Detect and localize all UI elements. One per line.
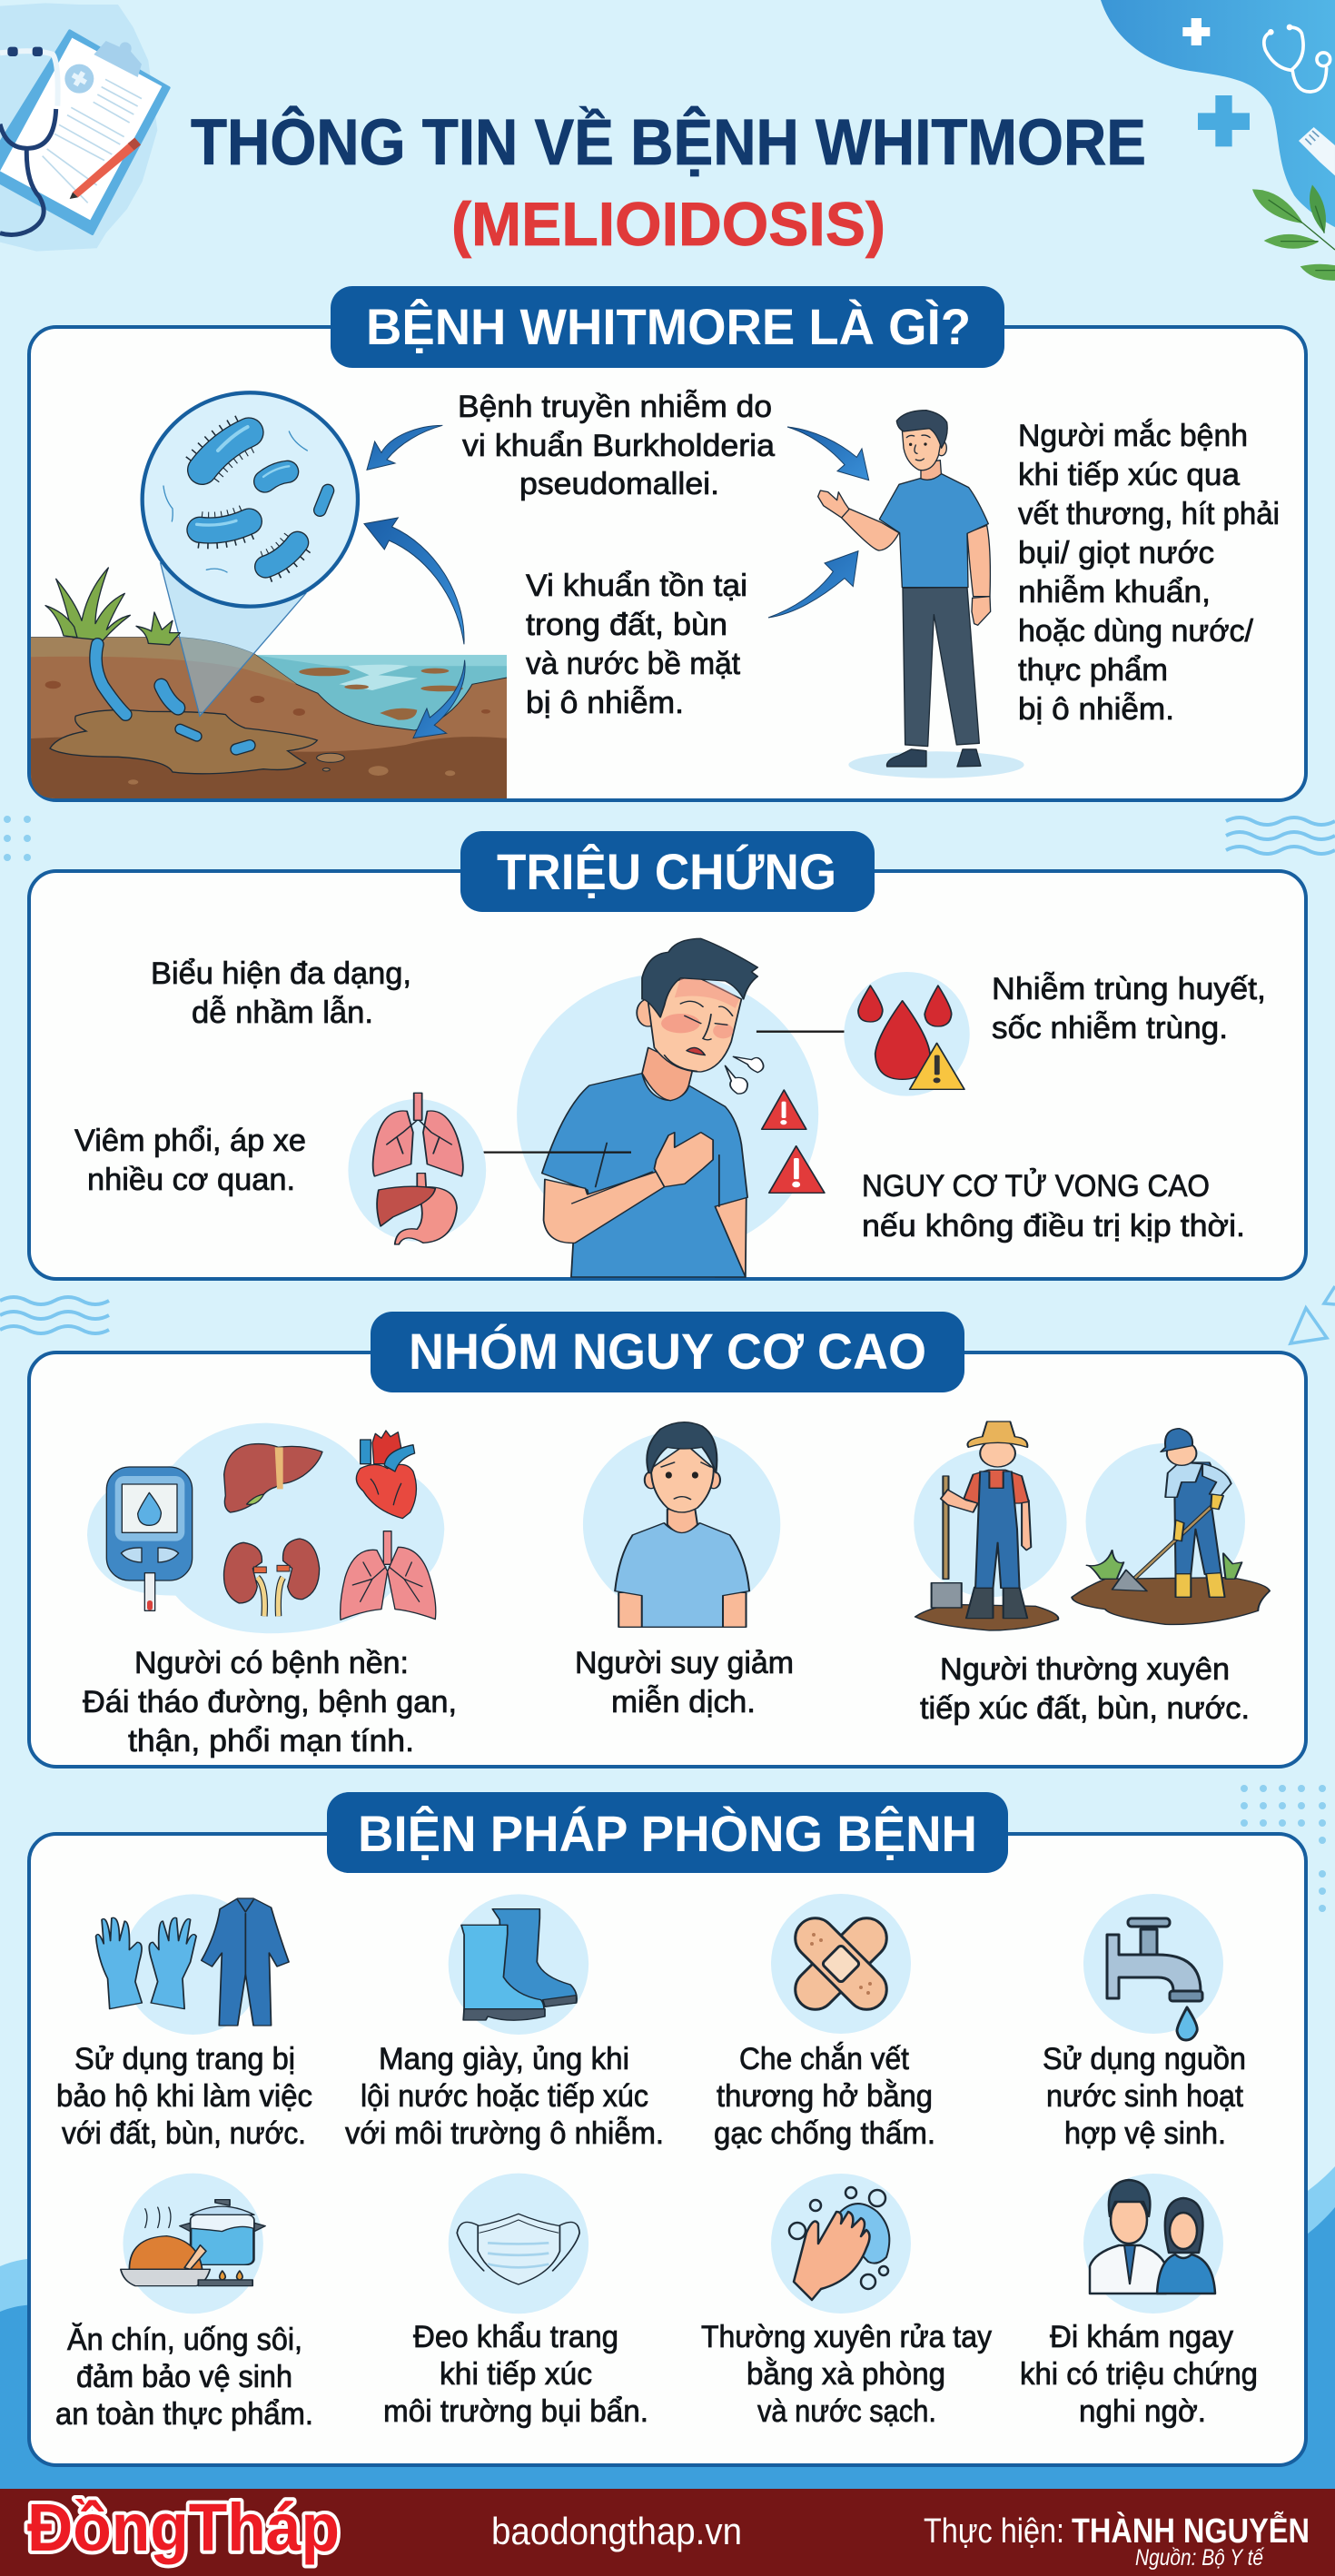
heading pill: NHÓM NGUY CƠ CAO xyxy=(409,1323,926,1380)
illustration: person with weak immunity xyxy=(583,1422,780,1627)
text: how people get infected: nhiễm khuẩn, xyxy=(1018,575,1211,609)
text: see a doctor: nghi ngờ. xyxy=(1079,2394,1206,2429)
text: soil contact xyxy=(920,1652,1250,1726)
text: wear a mask: môi trường bụi bẩn. xyxy=(383,2394,648,2429)
text: pneumonia: Viêm phổi, áp xe xyxy=(74,1124,306,1158)
text: varied manifestations: dễ nhầm lẫn. xyxy=(192,996,373,1030)
text: definition xyxy=(458,390,775,501)
text: immunocompromised: miễn dịch. xyxy=(611,1685,756,1719)
text: cover wounds: thương hở bằng xyxy=(717,2079,933,2114)
text: soil contact: tiếp xúc đất, bùn, nước. xyxy=(920,1691,1250,1726)
icons: medical decoration top right xyxy=(1182,18,1335,281)
heading pill xyxy=(331,286,1004,368)
footer xyxy=(0,2489,1335,2576)
website: baodongthap.vn xyxy=(491,2510,742,2552)
text: high mortality risk xyxy=(862,1169,1245,1243)
text: underlying disease: Đái tháo đường, bệnh gan, xyxy=(83,1685,457,1719)
text: how people get infected: hoặc dùng nước/ xyxy=(1018,614,1254,649)
text: where bacteria live: trong đất, bùn xyxy=(526,608,727,642)
icon: doctor and patient xyxy=(1083,2174,1223,2313)
text: high mortality risk: nếu không điều trị kịp thời. xyxy=(862,1209,1245,1243)
text: wash hands: và nước sạch. xyxy=(757,2394,936,2429)
icon: hand washing xyxy=(771,2174,911,2313)
icon: water tap xyxy=(1083,1894,1223,2040)
illustration: farmer and digger working in mud xyxy=(914,1422,1270,1630)
panel: symptoms xyxy=(29,831,1306,1279)
text: see a doctor: Đi khám ngay xyxy=(1050,2320,1233,2354)
text: wash hands xyxy=(701,2320,992,2429)
text: cover wounds: Che chắn vết xyxy=(739,2042,910,2076)
text: how people get infected: Người mắc bệnh xyxy=(1018,419,1248,453)
panel: prevention xyxy=(29,1792,1306,2465)
text: sepsis: Nhiễm trùng huyết, xyxy=(992,972,1266,1006)
title: THÔNG TIN VỀ BỆNH WHITMORE xyxy=(191,106,1146,179)
icon: face mask xyxy=(449,2174,588,2313)
text: pneumonia xyxy=(74,1124,306,1197)
text: sepsis xyxy=(992,972,1266,1045)
icon: cooked chicken and boiling pot xyxy=(121,2174,265,2313)
text: food safety xyxy=(55,2323,313,2432)
icon: lungs, liver and stomach xyxy=(348,1093,486,1244)
text: boots: với môi trường ô nhiễm. xyxy=(345,2116,664,2151)
text: see a doctor xyxy=(1020,2320,1258,2429)
text: pneumonia: nhiều cơ quan. xyxy=(87,1163,295,1197)
credit: Thực hiện: xyxy=(924,2512,1064,2551)
text: food safety: Ăn chín, uống sôi, xyxy=(67,2323,302,2357)
text: boots: lội nước hoặc tiếp xúc xyxy=(361,2079,648,2114)
text: food safety: an toàn thực phẩm. xyxy=(55,2397,313,2432)
text: protective equipment: Sử dụng trang bị xyxy=(74,2042,295,2076)
icon: gloves and coverall xyxy=(96,1894,289,2035)
illustration: contaminated soil and water with magnified bacteria xyxy=(27,392,511,806)
illustration: clipboard and stethoscope xyxy=(0,3,169,252)
text: how people get infected xyxy=(1018,419,1280,727)
illustration: glucose meter and organs xyxy=(87,1423,444,1633)
text: underlying disease xyxy=(83,1646,457,1759)
text: cover wounds xyxy=(714,2042,935,2151)
text: immunocompromised xyxy=(575,1646,794,1719)
text: wear a mask: Đeo khẩu trang xyxy=(413,2320,618,2354)
text: how people get infected: khi tiếp xúc qua xyxy=(1018,458,1240,492)
text: where bacteria live: bị ô nhiễm. xyxy=(526,686,684,720)
panel: high-risk groups xyxy=(29,1312,1306,1767)
text: how people get infected: bụi/ giọt nước xyxy=(1018,536,1214,570)
text: wear a mask: khi tiếp xúc xyxy=(440,2357,592,2392)
text: varied manifestations: Biểu hiện đa dạng, xyxy=(151,956,411,991)
text: how people get infected: thực phẩm xyxy=(1018,653,1168,688)
text: food safety: đảm bảo vệ sinh xyxy=(76,2360,292,2394)
text: immunocompromised: Người suy giảm xyxy=(575,1646,794,1680)
title: (MELIOIDOSIS) xyxy=(451,190,885,259)
text: varied manifestations xyxy=(151,956,411,1030)
icon: rubber boots xyxy=(449,1894,588,2035)
heading pill xyxy=(327,1792,1008,1873)
text: clean water: hợp vệ sinh. xyxy=(1064,2116,1226,2151)
source: Nguồn: Bộ Y tế xyxy=(1135,2545,1265,2571)
text: high mortality risk: NGUY CƠ TỬ VONG CAO xyxy=(862,1169,1210,1204)
icon: crossed bandages xyxy=(771,1894,911,2034)
text: definition: pseudomallei. xyxy=(519,467,719,501)
heading pill: BỆNH WHITMORE LÀ GÌ? xyxy=(366,298,971,355)
logo: ĐồngTháp xyxy=(27,2490,340,2565)
heading pill xyxy=(460,831,875,912)
title xyxy=(191,106,1146,259)
text: definition: vi khuẩn Burkholderia xyxy=(462,429,775,463)
text: underlying disease: thận, phổi mạn tính. xyxy=(128,1724,414,1759)
text: boots: Mang giày, ủng khi xyxy=(379,2042,629,2076)
arrow: to bacteria xyxy=(367,425,442,470)
text: definition: Bệnh truyền nhiễm do xyxy=(458,390,772,424)
heading pill xyxy=(371,1312,964,1392)
text: wash hands: bằng xà phòng xyxy=(747,2357,945,2392)
text: clean water: nước sinh hoạt xyxy=(1046,2079,1244,2114)
text: protective equipment: bảo hộ khi làm việc xyxy=(56,2079,312,2114)
icon: blood drops and warning xyxy=(844,972,970,1096)
text: cover wounds: gạc chống thấm. xyxy=(714,2116,935,2151)
text: clean water: Sử dụng nguồn xyxy=(1043,2042,1246,2076)
text: protective equipment xyxy=(56,2042,312,2151)
text: wash hands: Thường xuyên rửa tay xyxy=(701,2320,992,2354)
text: boots xyxy=(345,2042,664,2151)
illustration: sick man holding chest with organs, blood and warnings xyxy=(348,938,970,1277)
text: where bacteria live xyxy=(526,569,747,720)
text: clean water xyxy=(1043,2042,1246,2151)
text: how people get infected: vết thương, hít phải xyxy=(1018,497,1280,531)
text: where bacteria live: Vi khuẩn tồn tại xyxy=(526,569,747,603)
text: sepsis: sốc nhiễm trùng. xyxy=(992,1011,1228,1045)
text: wear a mask xyxy=(383,2320,648,2429)
text: protective equipment: với đất, bùn, nước. xyxy=(62,2116,306,2151)
text: how people get infected: bị ô nhiễm. xyxy=(1018,692,1174,727)
text: soil contact: Người thường xuyên xyxy=(940,1652,1230,1687)
heading pill: BIỆN PHÁP PHÒNG BỆNH xyxy=(358,1805,977,1862)
text: underlying disease: Người có bệnh nền: xyxy=(134,1646,409,1680)
text: see a doctor: khi có triệu chứng xyxy=(1020,2357,1258,2392)
illustration: standing man with arrows xyxy=(768,411,1024,778)
heading pill: TRIỆU CHỨNG xyxy=(497,843,836,900)
text: where bacteria live: và nước bề mặt xyxy=(526,647,741,681)
panel: what is Whitmore disease xyxy=(27,286,1306,806)
